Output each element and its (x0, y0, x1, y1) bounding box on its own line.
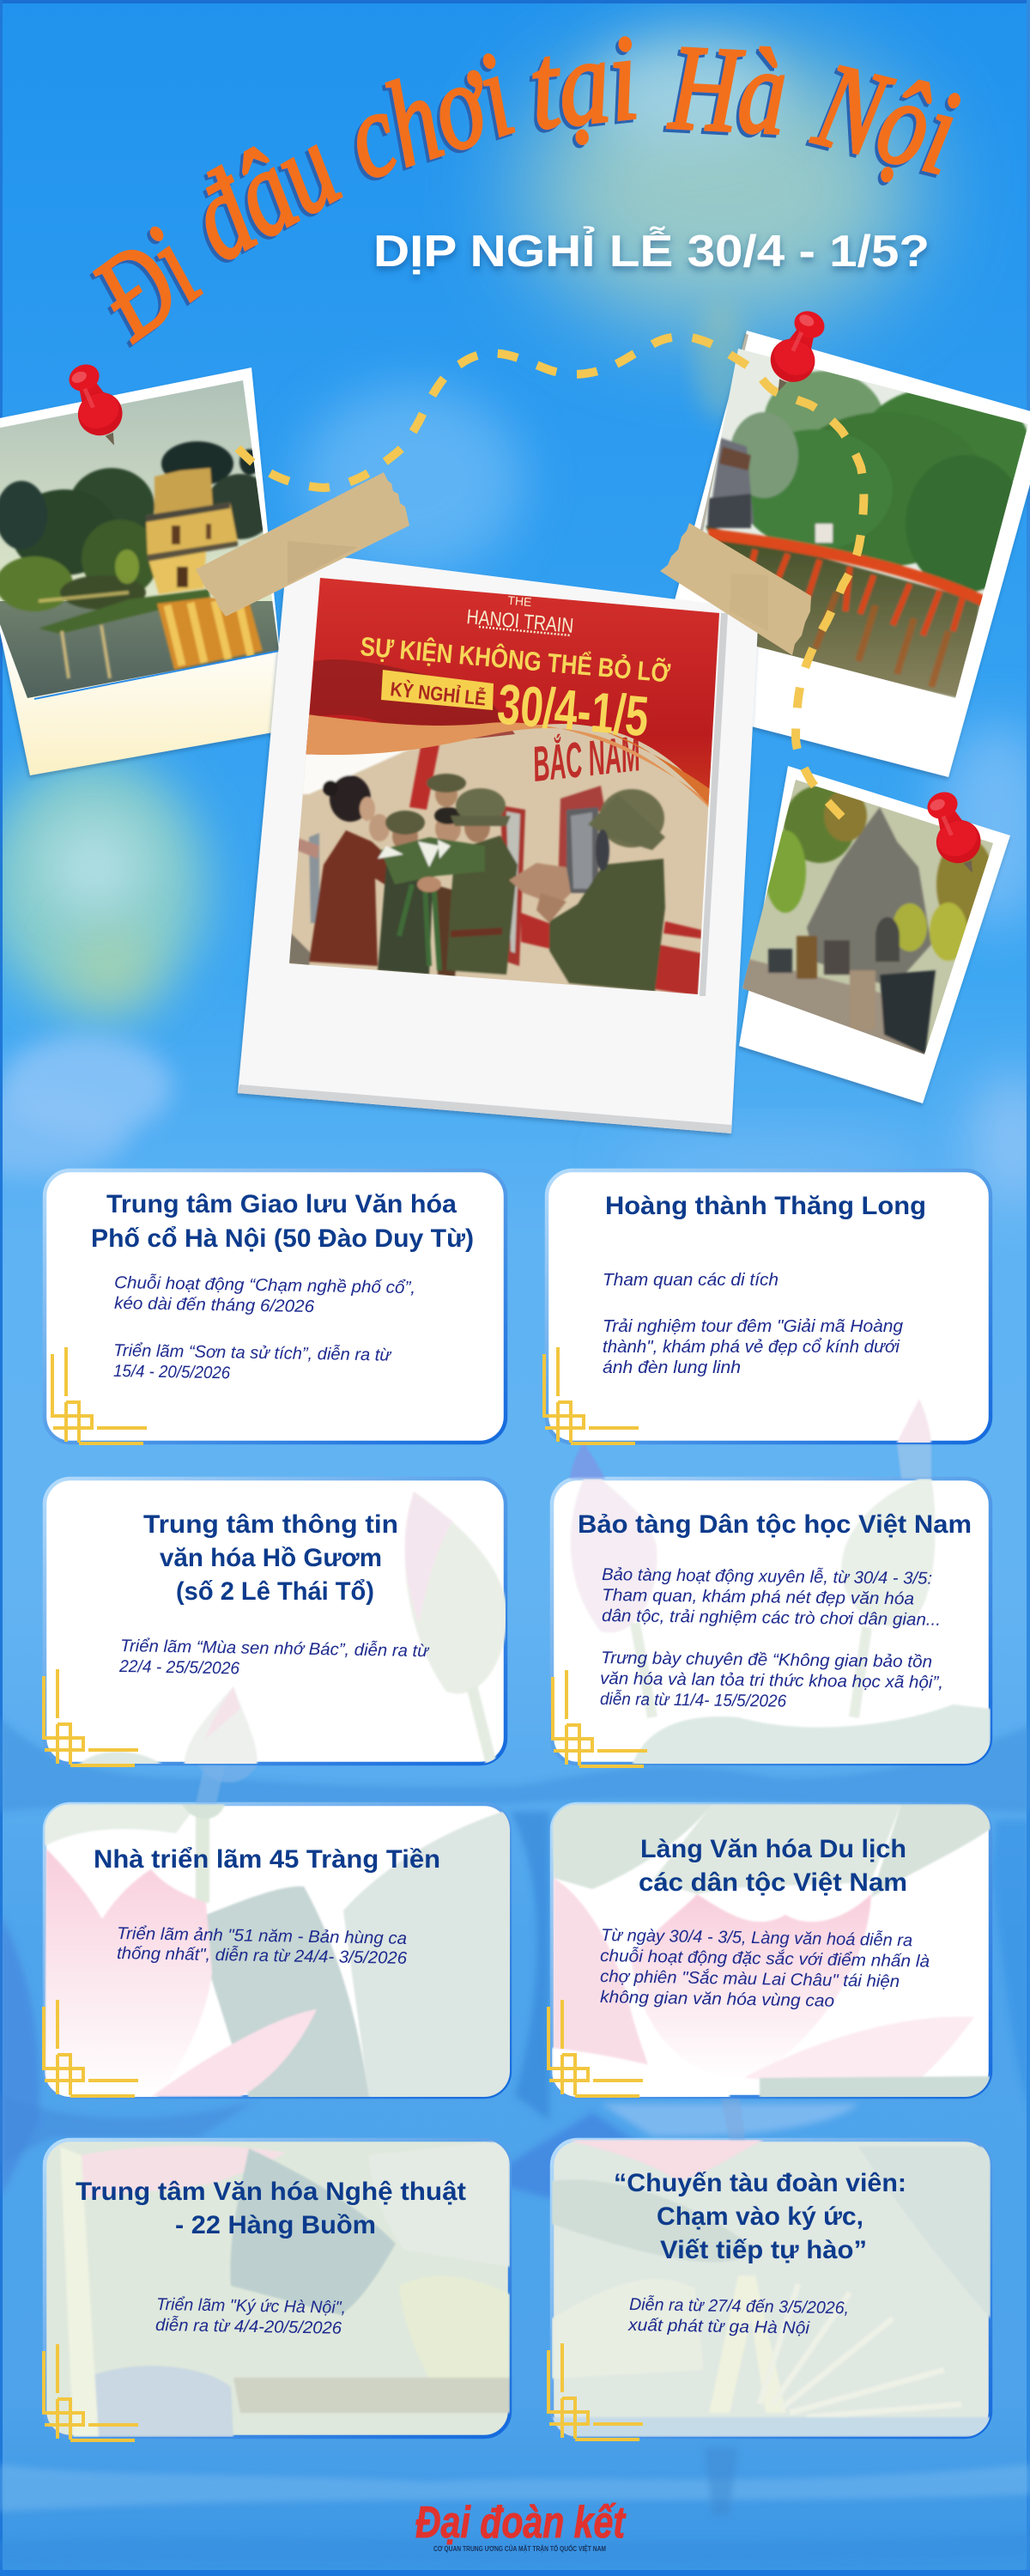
text block: xuất phát từ ga Hà Nội (627, 2316, 810, 2338)
photo: Huc Bridge polaroid (648, 331, 1030, 777)
heading: Phố cổ Hà Nội (50 Đào Duy Từ) (91, 1224, 474, 1253)
bouquet (380, 837, 485, 884)
photo: St Joseph cathedral polaroid (738, 766, 1010, 1103)
panel: card 1 Trung tâm Giao lưu (91, 1190, 474, 1382)
photo: Turtle Tower polaroid (0, 368, 292, 775)
poster text: KỲ NGHỈ LỄ (389, 676, 488, 710)
heading: title script (69, 9, 970, 365)
panel: card 3 Hồ Gươm (118, 1510, 430, 1678)
red banner (306, 578, 719, 798)
heading: title script: Hà (665, 19, 790, 160)
panel: card 4 Bảo tàng Dân tộc học (578, 1510, 972, 1711)
card 2 bud tip (893, 1399, 931, 1451)
route: dashed line (238, 337, 863, 829)
heading: Hoàng thành Thăng Long (605, 1192, 926, 1220)
poster text: 30/4-1/5 (495, 671, 651, 748)
heading: văn hóa Hồ Gươm (160, 1544, 382, 1572)
heading (91, 1190, 474, 1253)
heading: Làng Văn hóa Du lịch (640, 1835, 906, 1863)
card 6 (552, 1804, 712, 1889)
text block: thống nhất", diễn ra từ 24/4- 3/5/2026 (117, 1943, 408, 1968)
text block: Tham quan, khám phá nét đẹp văn hóa (602, 1586, 914, 1608)
text block: văn hóa và lan tỏa tri thức khoa học xã hội”, (600, 1669, 943, 1692)
icon: red pin left (58, 357, 135, 454)
text block: Triển lãm “Mùa sen nhớ Bác”, diễn ra từ (120, 1636, 430, 1661)
heading (639, 1835, 907, 1897)
man right (549, 859, 665, 992)
heading: Trung tâm Văn hóa Nghệ thuật (76, 2178, 466, 2206)
text block: Triển lãm ảnh "51 năm - Bản hùng ca (117, 1924, 407, 1948)
text block: chợ phiên "Sắc màu Lai Châu" tái hiện (600, 1966, 900, 1991)
text block: 22/4 - 25/5/2026 (118, 1657, 240, 1678)
woman (308, 829, 388, 967)
heading: title script: tại (524, 9, 644, 155)
text block (627, 2294, 849, 2338)
icon: corner ornaments (44, 1347, 647, 2440)
panel: card 6 Làng Văn hóa Du lịch (600, 1835, 930, 2011)
card 5 (45, 1804, 197, 1846)
text block: ánh đèn lung linh (603, 1358, 741, 1377)
heading: Chạm vào ký ức, (657, 2202, 863, 2231)
text block: diễn ra từ 4/4-20/5/2026 (155, 2315, 342, 2338)
text block: Trải nghiệm tour đêm "Giải mã Hoàng (603, 1317, 903, 1336)
text block: Chuỗi hoạt động “Chạm nghề phố cổ”, (114, 1273, 415, 1297)
heading: (số 2 Lê Thái Tổ) (176, 1577, 374, 1606)
text block: Triển lãm "Ký ức Hà Nội", (156, 2295, 346, 2318)
text block (600, 1564, 943, 1711)
poster text: HANOI TRAIN (465, 605, 574, 638)
heading: Bảo tàng Dân tộc học Việt Nam (578, 1510, 972, 1539)
text block: không gian văn hóa vùng cao (600, 1988, 834, 2011)
heading: - 22 Hàng Buồm (175, 2211, 376, 2239)
text block (113, 1273, 415, 1382)
card 7 (71, 2146, 286, 2198)
background: blue lotus leaves and water (0, 1717, 1030, 2563)
heading: Viết tiếp tự hào” (660, 2236, 867, 2264)
card 3 bud (405, 1492, 506, 1693)
soldiers (378, 865, 433, 975)
card 8 (566, 2140, 764, 2181)
panel: card backgrounds (45, 1170, 991, 2437)
poster image (283, 567, 730, 1005)
icon: red pin cathedral (917, 785, 993, 882)
text block: Bảo tàng hoạt động xuyên lễ, từ 30/4 - 3/5: (602, 1564, 932, 1589)
text block: thành", khám phá vẻ đẹp cổ kính dưới (603, 1338, 900, 1357)
heading: Nhà triển lãm 45 Tràng Tiền (94, 1845, 440, 1874)
poster text: THE (507, 593, 532, 609)
panel: card 7 Hàng Buồm (76, 2178, 466, 2338)
background: lotus bud over sky gap (196, 1443, 931, 2140)
text block (603, 1271, 903, 1377)
text block (600, 1925, 930, 2011)
icon: red pin right (758, 303, 835, 401)
heading: title script: Đi (69, 201, 222, 365)
tape: left (196, 472, 409, 617)
heading: các dân tộc Việt Nam (639, 1868, 907, 1897)
text block (117, 1924, 408, 1968)
text block: kéo dài đến tháng 6/2026 (114, 1294, 315, 1316)
heading (76, 2178, 466, 2239)
heading (614, 2169, 906, 2264)
poster text (360, 596, 671, 736)
panel: card 2 Hoàng thành Thăng Long (603, 1192, 926, 1377)
text block: Từ ngày 30/4 - 3/5, Làng văn hoá diễn ra (601, 1925, 912, 1950)
heading: title script: chơi (330, 26, 528, 205)
text block (118, 1636, 430, 1678)
text block: Trưng bày chuyên đề “Không gian bảo tồn (601, 1649, 932, 1672)
heading: title script: Nội (803, 35, 970, 200)
panel: card 5 Tràng Tiền (94, 1845, 440, 1968)
text block: Diễn ra từ 27/4 đến 3/5/2026, (629, 2294, 849, 2318)
text block: chuỗi hoạt động đặc sắc với điểm nhấn là (600, 1946, 930, 1971)
text block: diễn ra từ 11/4- 15/5/2026 (600, 1689, 787, 1711)
text block (155, 2295, 346, 2338)
text block: dân tộc, trải nghiệm các trò chơi dân gian... (602, 1607, 941, 1630)
photo: central Hanoi Train polaroid (238, 550, 759, 1133)
card 4 (571, 1479, 657, 1632)
text block: Triển lãm “Sơn ta sử tích”, diễn ra từ (113, 1340, 392, 1365)
text block: Tham quan các di tích (603, 1271, 779, 1290)
heading: “Chuyến tàu đoàn viên: (614, 2169, 906, 2197)
logo: Đại đoàn kết: Đại đoàn kết (415, 2498, 627, 2548)
poster text: SỰ KIỆN KHÔNG THỂ BỎ LỠ (359, 630, 672, 689)
background: translucent lotus in cards (45, 1399, 991, 2437)
heading: subtitle: DỊP NGHỈ LỄ 30/4 - 1/5? (373, 226, 930, 276)
poster image: BẮC NAM (530, 726, 643, 793)
heading: title script: đâu (167, 98, 359, 287)
panel: card 8 Chuyến tàu đoàn viên (614, 2169, 906, 2338)
text block: 15/4 - 20/5/2026 (113, 1362, 231, 1382)
heading: Trung tâm thông tin (143, 1510, 398, 1539)
logo: Đại đoàn kết: CƠ QUAN TRUNG ƯƠNG CỦA MẶT TRẬN TỔ QUỐC VIỆT NAM (433, 2544, 606, 2553)
tape: right (660, 523, 811, 655)
heading (143, 1510, 398, 1606)
heading: Trung tâm Giao lưu Văn hóa (106, 1190, 457, 1218)
